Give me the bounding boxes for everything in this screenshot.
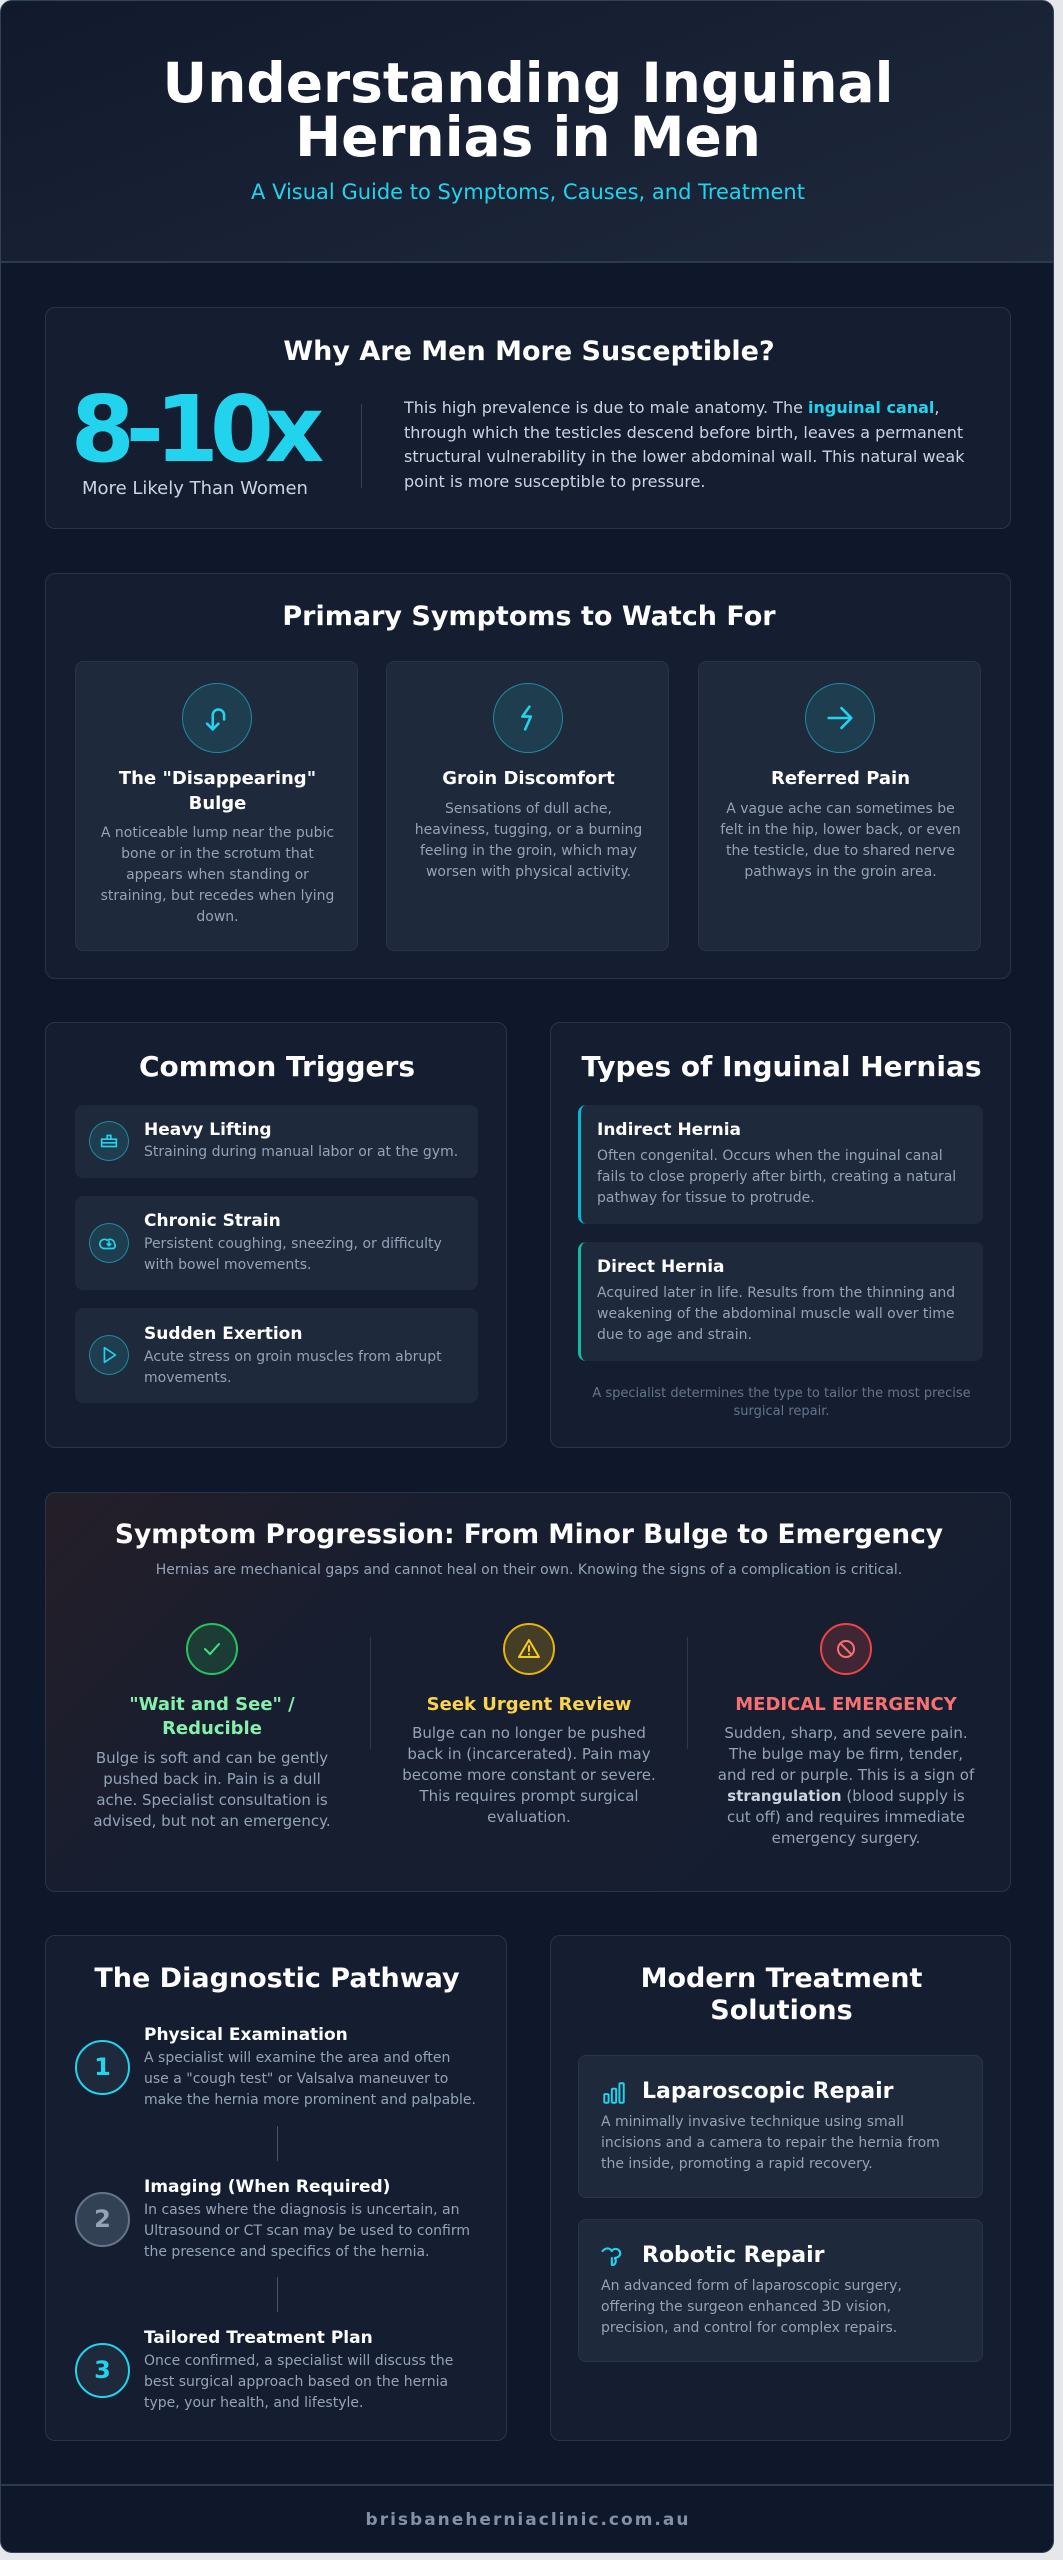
title: Imaging (When Required): [144, 2177, 390, 2197]
title: Heavy Lifting: [144, 1120, 272, 1140]
icon: weight: [89, 1121, 129, 1161]
stage: wait and see: [93, 1623, 331, 1830]
footnote: A specialist determines the type to tailor the most precise surgical repair.: [592, 1386, 971, 1418]
title: Sudden Exertion: [144, 1324, 302, 1344]
treatment: laparoscopic: [578, 2055, 983, 2198]
explanation text: This high prevalence is due to male anatomy. The inguinal canal, through which the testicles descend before birth, leaves a permanent structural vulnerability in the lower abdominal wall. This natural weak point is more susceptible to pressure.: [404, 398, 964, 490]
icon: play: [89, 1335, 129, 1375]
trigger: chronic strain: [75, 1196, 478, 1290]
panel: diagnostic pathway: [45, 1935, 507, 2441]
body: Sensations of dull ache, heaviness, tugging, or a burning feeling in the groin, which may worsen with physical activity.: [415, 801, 642, 880]
body: Often congenital. Occurs when the inguinal canal fails to close properly after birth, creating a natural pathway for tissue to protrude.: [597, 1148, 956, 1206]
title: Direct Hernia: [597, 1257, 725, 1277]
subheading: Hernias are mechanical gaps and cannot heal on their own. Knowing the signs of a complication is critical.: [156, 1562, 902, 1578]
number badge 1: [75, 2040, 130, 2095]
panel: types of hernias: [550, 1022, 1011, 1448]
title: Referred Pain: [771, 768, 910, 789]
number badge 3: [75, 2343, 130, 2398]
title: Seek Urgent Review: [427, 1694, 631, 1715]
number badge 2: [75, 2192, 130, 2247]
number badge 1: 1: [94, 2053, 111, 2081]
icon: lightning: [493, 683, 563, 753]
title: Robotic Repair: [642, 2243, 825, 2268]
symptom card: referred pain: [698, 661, 981, 951]
symptom card: bulge: [75, 661, 358, 951]
body: A minimally invasive technique using small incisions and a camera to repair the hernia from the inside, promoting a rapid recovery.: [601, 2114, 940, 2172]
title: Bulge: [189, 793, 246, 814]
body: Acquired later in life. Results from the thinning and weakening of the abdominal muscle wall over time due to age and strain.: [597, 1285, 955, 1343]
step 3: [75, 2328, 453, 2411]
icon: check: [186, 1623, 238, 1675]
trigger: sudden exertion: [75, 1308, 478, 1403]
stage: urgent review: [402, 1623, 656, 1826]
type: direct: [578, 1242, 983, 1361]
title: MEDICAL EMERGENCY: [735, 1694, 957, 1715]
trigger: heavy lifting: [75, 1105, 478, 1178]
type: indirect: [578, 1105, 983, 1224]
title: [129, 1694, 295, 1739]
heading: Why Are Men More Susceptible?: [283, 336, 775, 367]
icon: robotic arm: [601, 2247, 622, 2266]
icon: arrow right: [805, 683, 875, 753]
body: A specialist will examine the area and often: [144, 2050, 450, 2066]
panel: symptom progression: [45, 1492, 1011, 1892]
heading: Types of Inguinal Hernias: [581, 1050, 982, 1083]
step 2: [75, 2177, 470, 2260]
stat caption: More Likely Than Women: [82, 478, 308, 499]
title: Hernias in Men: [295, 105, 761, 169]
body: A noticeable lump near the pubic bone or in the scrotum that appears when standing or straining, but recedes when lying down.: [101, 825, 334, 925]
title: Tailored Treatment Plan: [144, 2328, 373, 2348]
title: Groin Discomfort: [442, 768, 615, 789]
body: An advanced form of laparoscopic surgery, offering the surgeon enhanced 3D vision, precision, and control for complex repairs.: [601, 2278, 902, 2336]
panel: primary symptoms: [45, 573, 1011, 979]
header: [1, 1, 1055, 263]
body: A vague ache can sometimes be felt in the hip, lower back, or even the testicle, due to shared nerve pathways in the groin area.: [720, 801, 961, 880]
icon: prohibited: [820, 1623, 872, 1675]
heading: Symptom Progression: From Minor Bulge to Emergency: [115, 1519, 943, 1550]
body: In cases where the diagnosis is uncertain, an Ultrasound or CT scan may be used to confirm the presence and specifics of the hernia.: [144, 2202, 470, 2260]
title: Understanding Inguinal: [163, 51, 893, 115]
heading: Primary Symptoms to Watch For: [282, 601, 776, 632]
step 1: [75, 2025, 476, 2108]
body: Bulge can no longer be pushed back in (incarcerated). Pain may become more constant or severe. This requires prompt surgical evaluation.: [402, 1724, 656, 1826]
title: Chronic Strain: [144, 1211, 281, 1231]
title: [118, 768, 316, 814]
body: Sudden, sharp, and severe pain. The bulge may be firm, tender, and red or purple. This is a sign of strangulation (blood supply is cut off) and requires immediate emergency surgery.: [718, 1724, 974, 1847]
body: Straining during manual labor or at the gym.: [144, 1144, 458, 1160]
title: [163, 51, 893, 169]
heading: Modern Treatment: [641, 1963, 922, 1994]
body: Once confirmed, a specialist will discuss the best surgical approach based on the hernia type, your health, and lifestyle.: [144, 2353, 453, 2411]
body: make the hernia more prominent and palpable.: [144, 2092, 476, 2108]
body: [144, 2050, 476, 2108]
panel: modern treatment: [550, 1935, 1011, 2441]
stage: medical emergency: [718, 1623, 975, 1847]
panel: common triggers: [45, 1022, 507, 1448]
icon: warning: [503, 1623, 555, 1675]
body: use a "cough test" or Valsalva maneuver to: [144, 2071, 448, 2087]
title: The "Disappearing": [119, 768, 316, 789]
heading: Common Triggers: [139, 1050, 415, 1083]
subtitle: A Visual Guide to Symptoms, Causes, and Treatment: [251, 180, 805, 204]
heading: Solutions: [710, 1995, 853, 2026]
title: Physical Examination: [144, 2025, 348, 2045]
panel: why men more susceptible: [45, 307, 1011, 529]
body: Bulge is soft and can be gently pushed back in. Pain is a dull ache. Specialist consultation is advised, but not an emergency.: [93, 1749, 331, 1830]
icon: cough: [89, 1223, 129, 1263]
heading: The Diagnostic Pathway: [94, 1963, 460, 1994]
heading: [641, 1963, 922, 2026]
icon: bars: [603, 2082, 625, 2104]
title: Laparoscopic Repair: [642, 2079, 894, 2104]
treatment: robotic: [578, 2219, 983, 2362]
title: "Wait and See" /: [129, 1694, 295, 1715]
body: Persistent coughing, sneezing, or difficulty with bowel movements.: [144, 1236, 442, 1273]
footer: website: brisbaneherniaclinic.com.au: [366, 2510, 690, 2530]
symptom card: groin discomfort: [386, 661, 669, 951]
title: Indirect Hernia: [597, 1120, 741, 1140]
body: Acute stress on groin muscles from abrupt movements.: [144, 1349, 442, 1386]
number badge 2: 2: [94, 2205, 111, 2233]
icon: bulge arrow: [182, 683, 252, 753]
title: Reducible: [162, 1718, 262, 1739]
number badge 3: 3: [94, 2356, 111, 2384]
stat: 8-10x: 8-10x: [71, 376, 315, 483]
